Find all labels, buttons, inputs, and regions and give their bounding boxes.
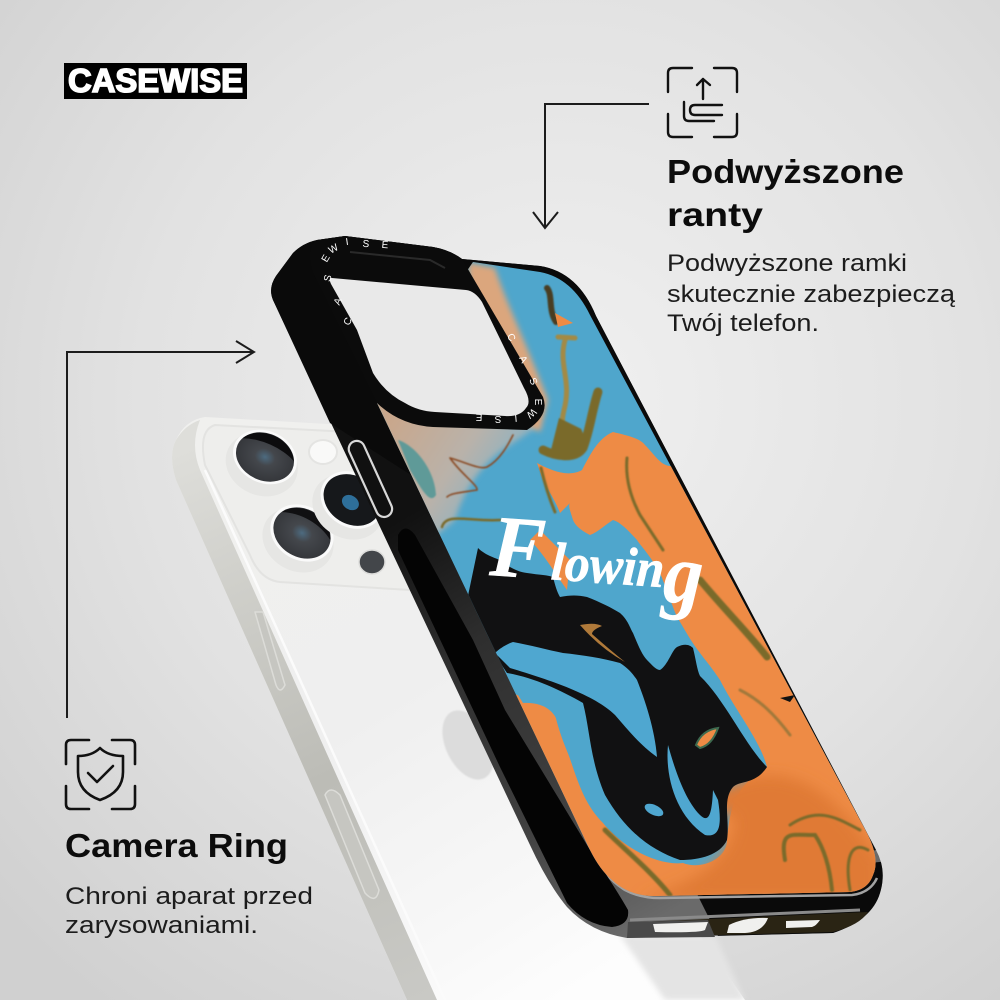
small orange spot — [696, 728, 718, 748]
ring lettering: S — [362, 239, 370, 250]
logo: CASEWISE — [68, 62, 243, 99]
ring lettering: E — [320, 253, 333, 264]
lower blue band — [513, 687, 683, 863]
ring lettering: I — [514, 412, 518, 423]
icon: shield — [66, 740, 135, 809]
phone side band — [172, 420, 437, 1000]
small dark fleck — [780, 695, 795, 702]
camera plateau — [203, 425, 410, 590]
soft shadow below case — [620, 935, 745, 1000]
blue swirl in black — [667, 745, 720, 835]
side highlight line — [205, 470, 445, 1000]
speaker and port holes — [653, 918, 820, 933]
inner lip highlight — [350, 252, 445, 268]
flash — [309, 440, 337, 464]
text: raised edges: Twój telefon. — [667, 310, 819, 337]
side buttons — [255, 612, 379, 898]
case shell upper opaque part — [271, 236, 876, 890]
camera ring — [310, 236, 545, 430]
ring lettering: C — [342, 316, 355, 327]
bottom face — [640, 912, 868, 937]
teal pocket — [398, 440, 436, 498]
volume button cutout — [346, 438, 395, 520]
text: raised edges — [667, 250, 956, 337]
text: camera ring: zarysowaniami. — [65, 912, 258, 939]
heading: raised edges: ranty — [667, 196, 764, 233]
small blue drop — [644, 804, 664, 816]
ring lettering: S — [322, 273, 335, 283]
white phone — [172, 417, 745, 1000]
beige area by camera — [377, 403, 536, 536]
text: camera ring: Chroni aparat przed — [65, 883, 313, 910]
case bottom opaque part — [698, 862, 883, 936]
icon: raised edges — [668, 68, 737, 137]
camera opening — [330, 278, 529, 416]
lens 2 — [250, 491, 348, 585]
bottom grey face — [627, 920, 715, 938]
ring lettering: A — [332, 296, 345, 307]
inner highlight line — [530, 720, 877, 898]
lens 3 — [300, 457, 398, 553]
darker orange lower field — [640, 775, 880, 900]
ring lettering: I — [345, 237, 349, 248]
text: camera ring — [65, 883, 313, 939]
heading: raised edges: Podwyższone — [667, 153, 904, 190]
blue tongue — [495, 642, 657, 757]
ring lettering: S — [526, 376, 539, 387]
heading: camera ring: Camera Ring — [65, 827, 288, 864]
text: raised edges: skutecznie zabezpieczą — [667, 281, 956, 308]
ring lettering: W — [523, 406, 538, 420]
heading: raised edges — [667, 153, 904, 233]
side slot — [398, 528, 628, 927]
phone body — [172, 417, 745, 1000]
text: raised edges: Podwyższone ramki — [667, 250, 907, 277]
ring lettering: C — [504, 332, 517, 343]
logo mark — [432, 702, 504, 788]
arrow: raised edges — [533, 104, 649, 228]
ring lettering — [320, 237, 543, 424]
ring lettering: E — [475, 411, 483, 422]
orange streak in black — [580, 624, 625, 662]
microphone sensor — [359, 550, 385, 574]
beige strip along ring — [468, 262, 548, 432]
black case — [271, 236, 883, 938]
ring lettering: W — [327, 242, 341, 256]
ring lettering: S — [494, 413, 501, 424]
script word: Flowin — [488, 498, 666, 600]
ring lettering: A — [516, 354, 529, 366]
blue base — [370, 255, 890, 905]
black pour — [465, 548, 767, 860]
orange patch below F — [530, 530, 570, 590]
script word: g — [659, 525, 706, 623]
orange main and lower field — [516, 432, 876, 896]
script word — [488, 518, 702, 620]
marble artwork — [370, 255, 900, 905]
ring lettering: E — [532, 399, 543, 406]
olive veins — [442, 288, 868, 895]
lens 1 — [215, 418, 309, 508]
ring lettering: E — [381, 240, 389, 251]
arrow: camera ring — [67, 341, 254, 718]
case shell — [271, 236, 883, 938]
bottom lip — [630, 910, 860, 920]
ring frame — [310, 236, 545, 430]
orange flake top — [555, 313, 573, 327]
